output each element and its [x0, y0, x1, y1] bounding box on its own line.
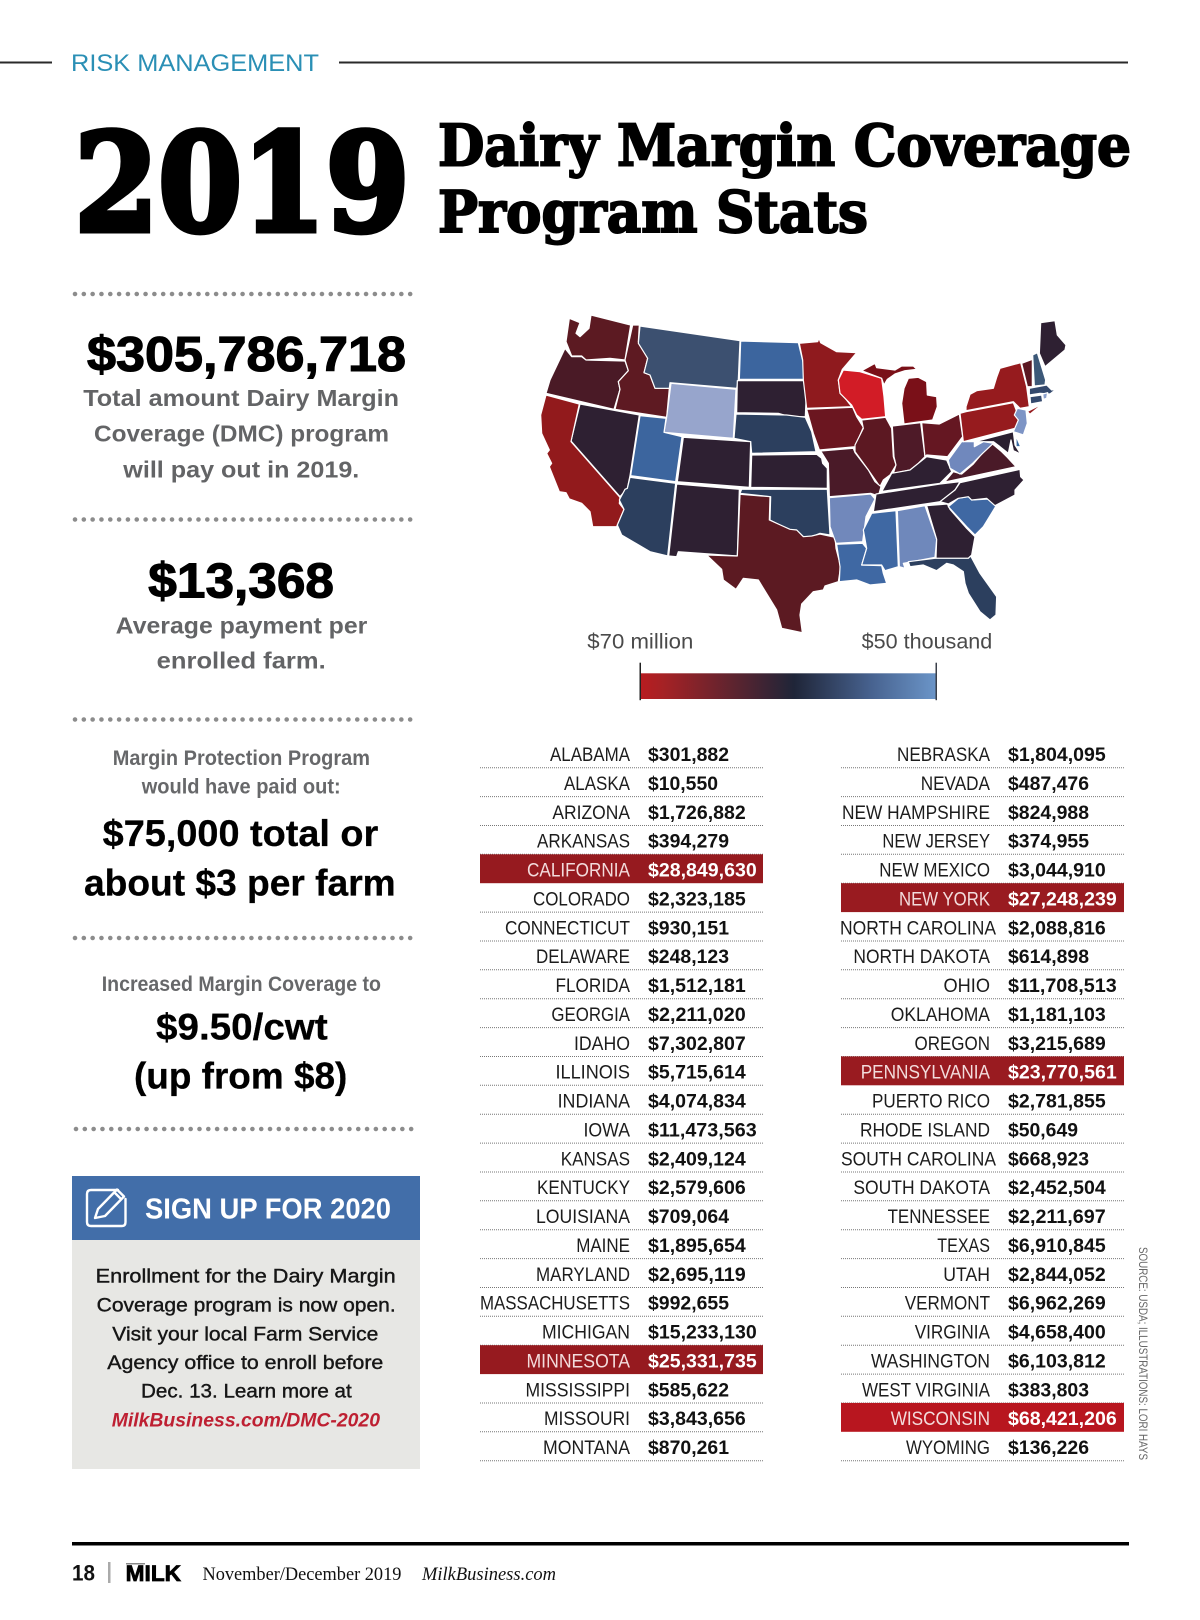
Illinois: [855, 417, 896, 487]
row: New Jersey: NEW JERSEY: [882, 832, 990, 853]
row: Texas: [841, 1236, 1124, 1259]
footer: November/December 2019: [202, 1565, 401, 1585]
row: Wyoming: [841, 1438, 1124, 1461]
Rhode Island: [1043, 393, 1048, 399]
stat: average payment: $13,368: [148, 554, 334, 608]
stat: increased margin coverage: [102, 972, 381, 1096]
row: Michigan: $15,233,130: [648, 1322, 757, 1343]
row: Wisconsin, highlighted: $68,421,206: [1008, 1409, 1117, 1430]
row: Kansas: $2,409,124: [648, 1149, 746, 1170]
row: Pennsylvania, highlighted: $23,770,561: [1008, 1063, 1117, 1084]
row: California, highlighted: [480, 854, 763, 883]
row: Washington: $6,103,812: [1008, 1351, 1106, 1372]
row: Oklahoma: $1,181,103: [1008, 1005, 1106, 1026]
row: West Virginia: $383,803: [1008, 1380, 1089, 1401]
row: Missouri: [480, 1409, 763, 1432]
row: Louisiana: [480, 1207, 763, 1230]
row: Nevada: NEVADA: [921, 774, 990, 795]
Pennsylvania: [960, 403, 1020, 442]
footer: MILK: [126, 1561, 182, 1586]
row: Rhode Island: $50,649: [1008, 1120, 1078, 1141]
row: Arizona: [480, 803, 763, 826]
row: North Carolina: $2,088,816: [1008, 918, 1106, 939]
stat: increased margin coverage: (up from $8): [134, 1055, 347, 1096]
row: Rhode Island: RHODE ISLAND: [860, 1120, 990, 1141]
row: Vermont: VERMONT: [905, 1294, 990, 1315]
Georgia: [927, 504, 975, 558]
row: Idaho: [480, 1034, 763, 1056]
West Virginia: [948, 442, 993, 474]
Virginia: [942, 443, 1016, 483]
row: Texas: $6,910,845: [1008, 1236, 1106, 1257]
choropleth map of the United States: [541, 315, 1066, 633]
row: Alabama: ALABAMA: [550, 745, 630, 766]
South Carolina: [948, 497, 996, 535]
row: Wyoming: WYOMING: [906, 1438, 990, 1459]
Wisconsin: [838, 370, 886, 419]
row: Iowa: [480, 1120, 763, 1143]
Missouri: [821, 448, 881, 497]
row: Idaho: IDAHO: [574, 1034, 630, 1055]
stat: total payout: [83, 328, 406, 482]
row: Massachusetts: $992,655: [648, 1294, 729, 1315]
row: South Dakota: $2,452,504: [1008, 1178, 1106, 1199]
row: Connecticut: [480, 918, 763, 941]
Massachusetts: [1029, 385, 1056, 395]
row: Louisiana: $709,064: [648, 1207, 729, 1228]
row: Maryland: MARYLAND: [536, 1265, 630, 1286]
Maine: [1039, 321, 1066, 367]
Nevada: [571, 404, 639, 497]
row: Nevada: [841, 774, 1124, 797]
row: Puerto Rico: PUERTO RICO: [872, 1091, 990, 1112]
New York: [966, 363, 1029, 411]
row: Maryland: [480, 1265, 763, 1288]
row: Oregon: OREGON: [914, 1034, 990, 1055]
row: New Mexico: $3,044,910: [1008, 861, 1106, 882]
Washington: [566, 315, 631, 360]
Tennessee: [873, 482, 960, 512]
stat: average payment: enrolled farm.: [157, 647, 326, 673]
row: Kansas: KANSAS: [561, 1149, 630, 1170]
row: Tennessee: $2,211,697: [1008, 1207, 1106, 1228]
row: Missouri: MISSOURI: [544, 1409, 630, 1430]
row: Florida: $1,512,181: [648, 976, 746, 997]
row: Illinois: $5,715,614: [648, 1063, 746, 1084]
Connecticut: [1030, 395, 1043, 404]
row: Alaska: $10,550: [648, 774, 718, 795]
row: Utah: UTAH: [943, 1265, 990, 1286]
row: Colorado: $2,323,185: [648, 889, 746, 910]
enrollment text: Coverage program is now open.: [97, 1295, 396, 1317]
row: Maryland: $2,695,119: [648, 1265, 746, 1286]
Colorado: [677, 437, 751, 487]
stat: average payment: [116, 554, 367, 673]
Oregon: [546, 348, 628, 409]
Utah: [631, 416, 682, 482]
row: New Hampshire: NEW HAMPSHIRE: [842, 803, 990, 824]
title: Dairy Margin Coverage Program Stats: [438, 112, 1131, 246]
row: Arizona: $1,726,882: [648, 803, 746, 824]
enrollment text: Visit your local Farm Service: [112, 1324, 378, 1346]
row: Illinois: ILLINOIS: [556, 1063, 630, 1084]
panel: sign up for 2020: [72, 1176, 420, 1469]
row: Florida: FLORIDA: [556, 976, 630, 997]
row: Florida: [480, 976, 763, 999]
title: Dairy Margin Coverage Program Stats: Dairy Margin Coverage: [438, 112, 1131, 180]
Alabama: [897, 506, 937, 568]
row: Kansas: [480, 1149, 763, 1172]
row: New York, highlighted: [841, 883, 1124, 912]
row: Maine: [480, 1236, 763, 1259]
stat: increased margin coverage: Increased Margin Coverage to: [102, 972, 381, 996]
row: Arkansas: $394,279: [648, 832, 729, 853]
row: Tennessee: [841, 1207, 1124, 1230]
row: Minnesota, highlighted: [480, 1345, 763, 1374]
row: Delaware: [480, 947, 763, 970]
Kansas: [751, 454, 827, 488]
stat: margin protection program: would have paid out:: [141, 775, 341, 799]
row: Oklahoma: [841, 1005, 1124, 1028]
row: Colorado: [480, 889, 763, 912]
row: Vermont: [841, 1294, 1124, 1316]
Mississippi: [862, 511, 898, 571]
row: Mississippi: [480, 1380, 763, 1403]
row: Iowa: $11,473,563: [648, 1120, 757, 1141]
row: Arkansas: ARKANSAS: [537, 832, 630, 853]
row: Massachusetts: MASSACHUSETTS: [480, 1294, 630, 1315]
row: South Carolina: SOUTH CAROLINA: [841, 1149, 996, 1170]
row: Oklahoma: OKLAHOMA: [891, 1005, 990, 1026]
stat: total payout: will pay out in 2019.: [122, 456, 359, 482]
row: Virginia: VIRGINIA: [915, 1322, 990, 1343]
title: Dairy Margin Coverage Program Stats: Program Stats: [438, 179, 868, 246]
enrollment text: Enrollment for the Dairy Margin: [96, 1266, 396, 1288]
row: Nevada: $487,476: [1008, 774, 1089, 795]
row: New Jersey: [841, 832, 1124, 854]
stat: margin protection program: Margin Protection Program: [113, 746, 370, 770]
Montana: [638, 326, 740, 388]
footer: MilkBusiness.com: [421, 1565, 556, 1585]
row: Tennessee: TENNESSEE: [888, 1207, 990, 1228]
stat: total payout: Coverage (DMC) program: [94, 420, 389, 446]
row: Colorado: COLORADO: [533, 889, 630, 910]
section header: risk management: RISK MANAGEMENT: [71, 50, 319, 77]
row: Washington: [841, 1351, 1124, 1374]
row: Kentucky: [480, 1178, 763, 1201]
row: Missouri: $3,843,656: [648, 1409, 746, 1430]
row: Puerto Rico: [841, 1092, 1124, 1114]
Ohio: [922, 414, 963, 457]
Iowa: [807, 407, 863, 450]
row: Pennsylvania, highlighted: PENNSYLVANIA: [861, 1063, 990, 1084]
row: Michigan: [480, 1322, 763, 1345]
New Mexico: [669, 484, 739, 557]
row: Delaware: $248,123: [648, 947, 729, 968]
row: North Dakota: NORTH DAKOTA: [853, 947, 990, 968]
row: New Jersey: $374,955: [1008, 832, 1089, 853]
heading: sign up: SIGN UP FOR 2020: [145, 1193, 391, 1225]
row: Minnesota, highlighted: $25,331,735: [648, 1351, 757, 1372]
row: South Dakota: [841, 1178, 1124, 1201]
title: 2019: 2019: [74, 104, 410, 262]
row: Delaware: DELAWARE: [536, 947, 630, 968]
row: South Carolina: [841, 1149, 1124, 1172]
stat: total payout: $305,786,718: [87, 328, 406, 382]
row: Alabama: [480, 745, 763, 768]
source credit: SOURCE: USDA; ILLUSTRATIONS: LORI HAYS: [1136, 1247, 1150, 1460]
stat: margin protection program: [84, 746, 396, 904]
row: Utah: $2,844,052: [1008, 1265, 1106, 1286]
Nebraska: [734, 414, 816, 453]
Maryland: [975, 432, 1021, 454]
Wyoming: [664, 383, 736, 438]
western states: [541, 315, 841, 633]
row: South Dakota: SOUTH DAKOTA: [853, 1178, 990, 1199]
row: Puerto Rico: $2,781,855: [1008, 1091, 1106, 1112]
California: [541, 395, 624, 527]
row: Mississippi: $585,622: [648, 1380, 729, 1401]
row: Arizona: ARIZONA: [552, 803, 630, 824]
Florida: [908, 556, 997, 620]
row: California, highlighted: $28,849,630: [648, 861, 757, 882]
row: Montana: [480, 1438, 763, 1461]
row: Montana: $870,261: [648, 1438, 729, 1459]
row: Georgia: GEORGIA: [551, 1005, 630, 1026]
Michigan lower peninsula: [902, 377, 937, 424]
row: North Carolina: NORTH CAROLINA: [840, 918, 996, 939]
row: New Hampshire: $824,988: [1008, 803, 1089, 824]
Texas: [707, 494, 841, 633]
row: Mississippi: MISSISSIPPI: [526, 1380, 630, 1401]
row: Nebraska: [841, 745, 1124, 768]
row: California, highlighted: CALIFORNIA: [527, 861, 630, 882]
stat: margin protection program: about $3 per farm: [84, 863, 396, 904]
eastern states: [799, 321, 1066, 620]
row: Indiana: [480, 1092, 763, 1114]
row: Texas: TEXAS: [937, 1236, 990, 1257]
row: New York, highlighted: NEW YORK: [899, 889, 990, 910]
row: Indiana: $4,074,834: [648, 1091, 746, 1112]
row: Wisconsin, highlighted: WISCONSIN: [891, 1409, 990, 1430]
row: Iowa: IOWA: [584, 1120, 630, 1141]
row: Ohio: OHIO: [944, 976, 990, 997]
row: Wisconsin, highlighted: [841, 1403, 1124, 1432]
row: Maine: $1,895,654: [648, 1236, 746, 1257]
row: Connecticut: $930,151: [648, 918, 729, 939]
stat: average payment: Average payment per: [116, 612, 367, 638]
enrollment text: Dec. 13. Learn more at: [141, 1381, 352, 1403]
row: Georgia: $2,211,020: [648, 1005, 746, 1026]
stat: margin protection program: $75,000 total or: [103, 813, 378, 854]
row: Georgia: [480, 1005, 763, 1028]
row: Kentucky: $2,579,606: [648, 1178, 746, 1199]
enrollment text: MilkBusiness.com/DMC-2020: [112, 1410, 380, 1432]
row: Pennsylvania, highlighted: [841, 1056, 1124, 1085]
row: Louisiana: LOUISIANA: [536, 1207, 630, 1228]
Oklahoma: [740, 489, 830, 537]
row: New Mexico: NEW MEXICO: [879, 861, 990, 882]
row: Utah: [841, 1265, 1124, 1288]
New Jersey: [1013, 408, 1027, 435]
Idaho: [615, 325, 669, 417]
North Dakota: [739, 341, 804, 379]
row: Michigan: MICHIGAN: [542, 1322, 630, 1343]
row: Montana: MONTANA: [543, 1438, 630, 1459]
row: Ohio: $11,708,513: [1008, 976, 1117, 997]
New Hampshire: [1033, 353, 1046, 386]
row: North Dakota: $614,898: [1008, 947, 1089, 968]
row: Washington: WASHINGTON: [871, 1351, 990, 1372]
map legend: $50 thousand: [862, 630, 992, 653]
table: states Nebraska to Wyoming: [840, 745, 1124, 1461]
row: West Virginia: WEST VIRGINIA: [862, 1380, 990, 1401]
row: Massachusetts: [480, 1294, 763, 1316]
footer: [72, 1542, 1129, 1586]
stat: increased margin coverage: $9.50/cwt: [156, 1006, 328, 1047]
South Dakota: [737, 381, 806, 417]
Indiana: [892, 423, 925, 473]
row: Ohio: [841, 976, 1124, 999]
map legend: $70 million: [587, 630, 693, 653]
row: Nebraska: $1,804,095: [1008, 745, 1106, 766]
North Carolina: [940, 469, 1024, 506]
enrollment text: [96, 1266, 396, 1432]
Delaware: [1016, 436, 1021, 447]
footer: 18: [72, 1560, 95, 1585]
icon: pencil on pad: [87, 1190, 126, 1226]
row: Oregon: [841, 1034, 1124, 1056]
row: Wyoming: $136,226: [1008, 1438, 1089, 1459]
stat: total payout: Total amount Dairy Margin: [83, 385, 399, 411]
map legend: [587, 630, 992, 700]
row: South Carolina: $668,923: [1008, 1149, 1089, 1170]
row: Illinois: [480, 1063, 763, 1085]
row: Nebraska: NEBRASKA: [897, 745, 990, 766]
row: Kentucky: KENTUCKY: [537, 1178, 630, 1199]
Kentucky: [880, 457, 952, 492]
row: Alaska: [480, 774, 763, 797]
row: West Virginia: [841, 1380, 1124, 1403]
row: Rhode Island: [841, 1120, 1124, 1143]
Arkansas: [829, 494, 875, 543]
Arizona: [617, 477, 676, 556]
row: New York, highlighted: $27,248,239: [1008, 889, 1117, 910]
row: Vermont: $6,962,269: [1008, 1294, 1106, 1315]
row: Maine: MAINE: [576, 1236, 630, 1257]
row: Virginia: [841, 1322, 1124, 1345]
row: Indiana: INDIANA: [558, 1091, 630, 1112]
Michigan upper peninsula: [862, 363, 917, 385]
Minnesota: [799, 338, 857, 408]
row: Arkansas: [480, 832, 763, 854]
row: New Hampshire: [841, 803, 1124, 826]
row: North Carolina: [840, 918, 1124, 941]
table: states Alabama to Montana: [480, 745, 763, 1461]
row: New Mexico: [841, 860, 1124, 883]
row: Minnesota, highlighted: MINNESOTA: [526, 1351, 630, 1372]
row: Oregon: $3,215,689: [1008, 1034, 1106, 1055]
row: Alabama: $301,882: [648, 745, 729, 766]
Louisiana: [837, 543, 887, 585]
row: Idaho: $7,302,807: [648, 1034, 746, 1055]
enrollment text: Agency office to enroll before: [107, 1352, 383, 1374]
Vermont: [1022, 359, 1032, 387]
row: Connecticut: CONNECTICUT: [505, 918, 630, 939]
row: North Dakota: [841, 947, 1124, 970]
row: Alaska: ALASKA: [564, 774, 630, 795]
Long Island: [1028, 407, 1038, 413]
row: Virginia: $4,658,400: [1008, 1322, 1106, 1343]
